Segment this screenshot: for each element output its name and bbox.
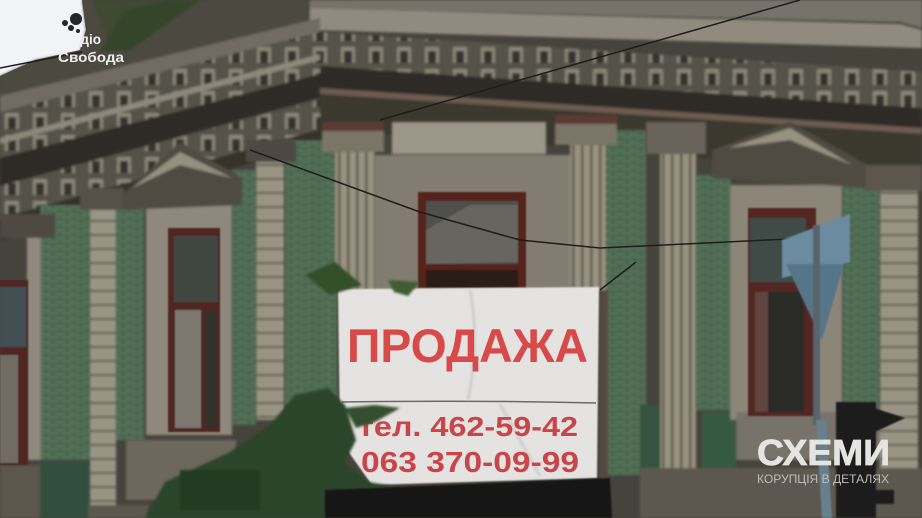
overhead wires bbox=[0, 0, 810, 290]
logo text: Radio: Радіо bbox=[64, 31, 101, 47]
logo: Radio Svoboda bbox=[62, 13, 101, 47]
logo wordmark: СХЕМИ bbox=[757, 432, 890, 473]
sky bbox=[0, 0, 86, 76]
green brick walls bbox=[40, 130, 880, 518]
window: centre bbox=[418, 192, 526, 288]
window: far left bbox=[0, 280, 28, 465]
windows bbox=[0, 192, 816, 465]
logo text: Svoboda: Свобода bbox=[58, 49, 124, 65]
ivy at bottom centre-left bbox=[145, 262, 420, 518]
logo tagline: КОРУПЦІЯ В ДЕТАЛЯХ bbox=[757, 472, 889, 486]
road sign: blue signs and pole bbox=[782, 214, 850, 518]
vine at top of roof bbox=[100, 0, 200, 52]
banner phone 2: 063 370-09-99 bbox=[361, 447, 579, 479]
banner phone 1: тел. 462-59-42 bbox=[358, 411, 578, 442]
pilasters and window surrounds bbox=[0, 115, 922, 518]
banner: sale sign bbox=[338, 287, 599, 485]
storefront awning at bottom bbox=[325, 478, 612, 518]
window: left bbox=[168, 228, 220, 432]
logo: Skhemy bbox=[757, 432, 890, 486]
upper facade and cornices bbox=[0, 0, 922, 240]
banner heading: ПРОДАЖА bbox=[347, 319, 588, 372]
traffic light bbox=[836, 402, 905, 518]
window: right bbox=[748, 208, 816, 416]
logo icon: dots bbox=[62, 13, 82, 33]
